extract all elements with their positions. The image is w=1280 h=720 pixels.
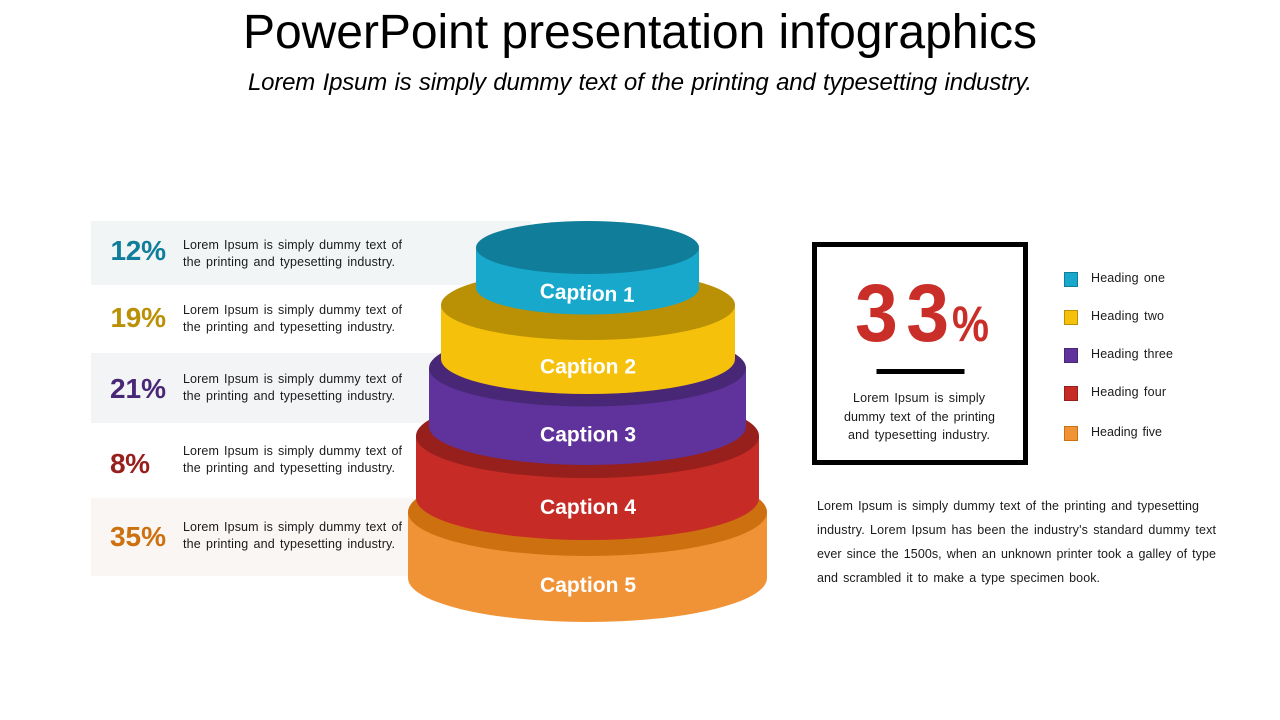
- title: PowerPoint presentation infographics: [243, 6, 1037, 59]
- panel: row 1 12%: the printing and typesetting industry.: [183, 255, 395, 269]
- tier 4 red: Caption 4: [540, 496, 636, 519]
- callout text: dummy text of the printing: [844, 410, 995, 424]
- panel: row 1 12%: 12%: [110, 235, 166, 266]
- panel: row 3 21%: [110, 372, 403, 404]
- legend item one: [1064, 271, 1165, 286]
- panel: row 3 21%: the printing and typesetting industry.: [183, 389, 395, 403]
- tier 2 yellow: [441, 270, 735, 394]
- legend item three: [1064, 347, 1173, 362]
- tier 4 red: [416, 394, 759, 540]
- panel: row 1 12%: Lorem Ipsum is simply dummy text of: [183, 238, 403, 252]
- tier 5 orange: Caption 5: [540, 574, 636, 597]
- legend item five: [1064, 425, 1162, 440]
- legend item five: Heading five: [1091, 425, 1162, 439]
- panel: row 5 35%: the printing and typesetting industry.: [183, 537, 395, 551]
- panel: row 2 19%: Lorem Ipsum is simply dummy text of: [183, 303, 403, 317]
- tier 5 orange: [408, 468, 767, 622]
- legend item two: [1064, 309, 1164, 324]
- tier 3 purple: Caption 3: [540, 424, 636, 446]
- panel: row 2 19%: the printing and typesetting industry.: [183, 320, 395, 334]
- text block: paragraph: [817, 499, 1217, 585]
- panel: row 3 21%: 21%: [110, 373, 166, 404]
- panel: row 5 35%: Lorem Ipsum is simply dummy text of: [183, 520, 403, 534]
- panel: row 2 19%: [110, 302, 403, 334]
- tier 1 blue: Caption 1: [539, 280, 636, 307]
- legend item four: Heading four: [1091, 385, 1166, 399]
- panel: row 5 35%: 35%: [110, 521, 166, 552]
- panel: row 4 8%: the printing and typesetting industry.: [183, 461, 395, 475]
- text block: paragraph: ever since the 1500s, when an unknown printer took a galley of type: [817, 547, 1216, 561]
- panel: 33% callout box: [814, 244, 1026, 462]
- legend item four: [1064, 385, 1166, 400]
- panel: row 3 21%: Lorem Ipsum is simply dummy text of: [183, 372, 403, 386]
- text block: paragraph: Lorem Ipsum is simply dummy text of the printing and typesetting: [817, 499, 1199, 513]
- tier 1 blue: [476, 221, 699, 314]
- panel: row 4 8%: Lorem Ipsum is simply dummy text of: [183, 444, 403, 458]
- text block: paragraph: and scrambled it to make a type specimen book.: [817, 571, 1100, 585]
- tier 2 yellow: Caption 2: [540, 356, 636, 378]
- panel: row 2 19%: 19%: [110, 302, 166, 333]
- legend item three: Heading three: [1091, 347, 1173, 361]
- tier 3 purple: [429, 330, 746, 465]
- legend: [1064, 271, 1173, 440]
- chart: stacked cylinder tiers: [408, 221, 767, 622]
- callout text: [844, 391, 995, 442]
- panel: row 4 8%: [110, 444, 403, 479]
- legend item one: Heading one: [1091, 271, 1165, 285]
- percent sign: %: [952, 296, 989, 352]
- panel: row 5 35%: [110, 520, 403, 552]
- text block: paragraph: industry. Lorem Ipsum has been the industry's standard dummy text: [817, 523, 1217, 537]
- big number 33: 33: [855, 267, 949, 359]
- callout text: and typesetting industry.: [848, 428, 990, 442]
- subtitle: Lorem Ipsum is simply dummy text of the printing and typesetting industry.: [248, 69, 1032, 96]
- legend item two: Heading two: [1091, 309, 1164, 323]
- panel: row 1 12%: [110, 235, 403, 269]
- panel: row 4 8%: 8%: [110, 448, 150, 479]
- divider bar: [876, 369, 964, 374]
- callout text: Lorem Ipsum is simply: [853, 391, 986, 405]
- panel: row backgrounds: [91, 221, 531, 576]
